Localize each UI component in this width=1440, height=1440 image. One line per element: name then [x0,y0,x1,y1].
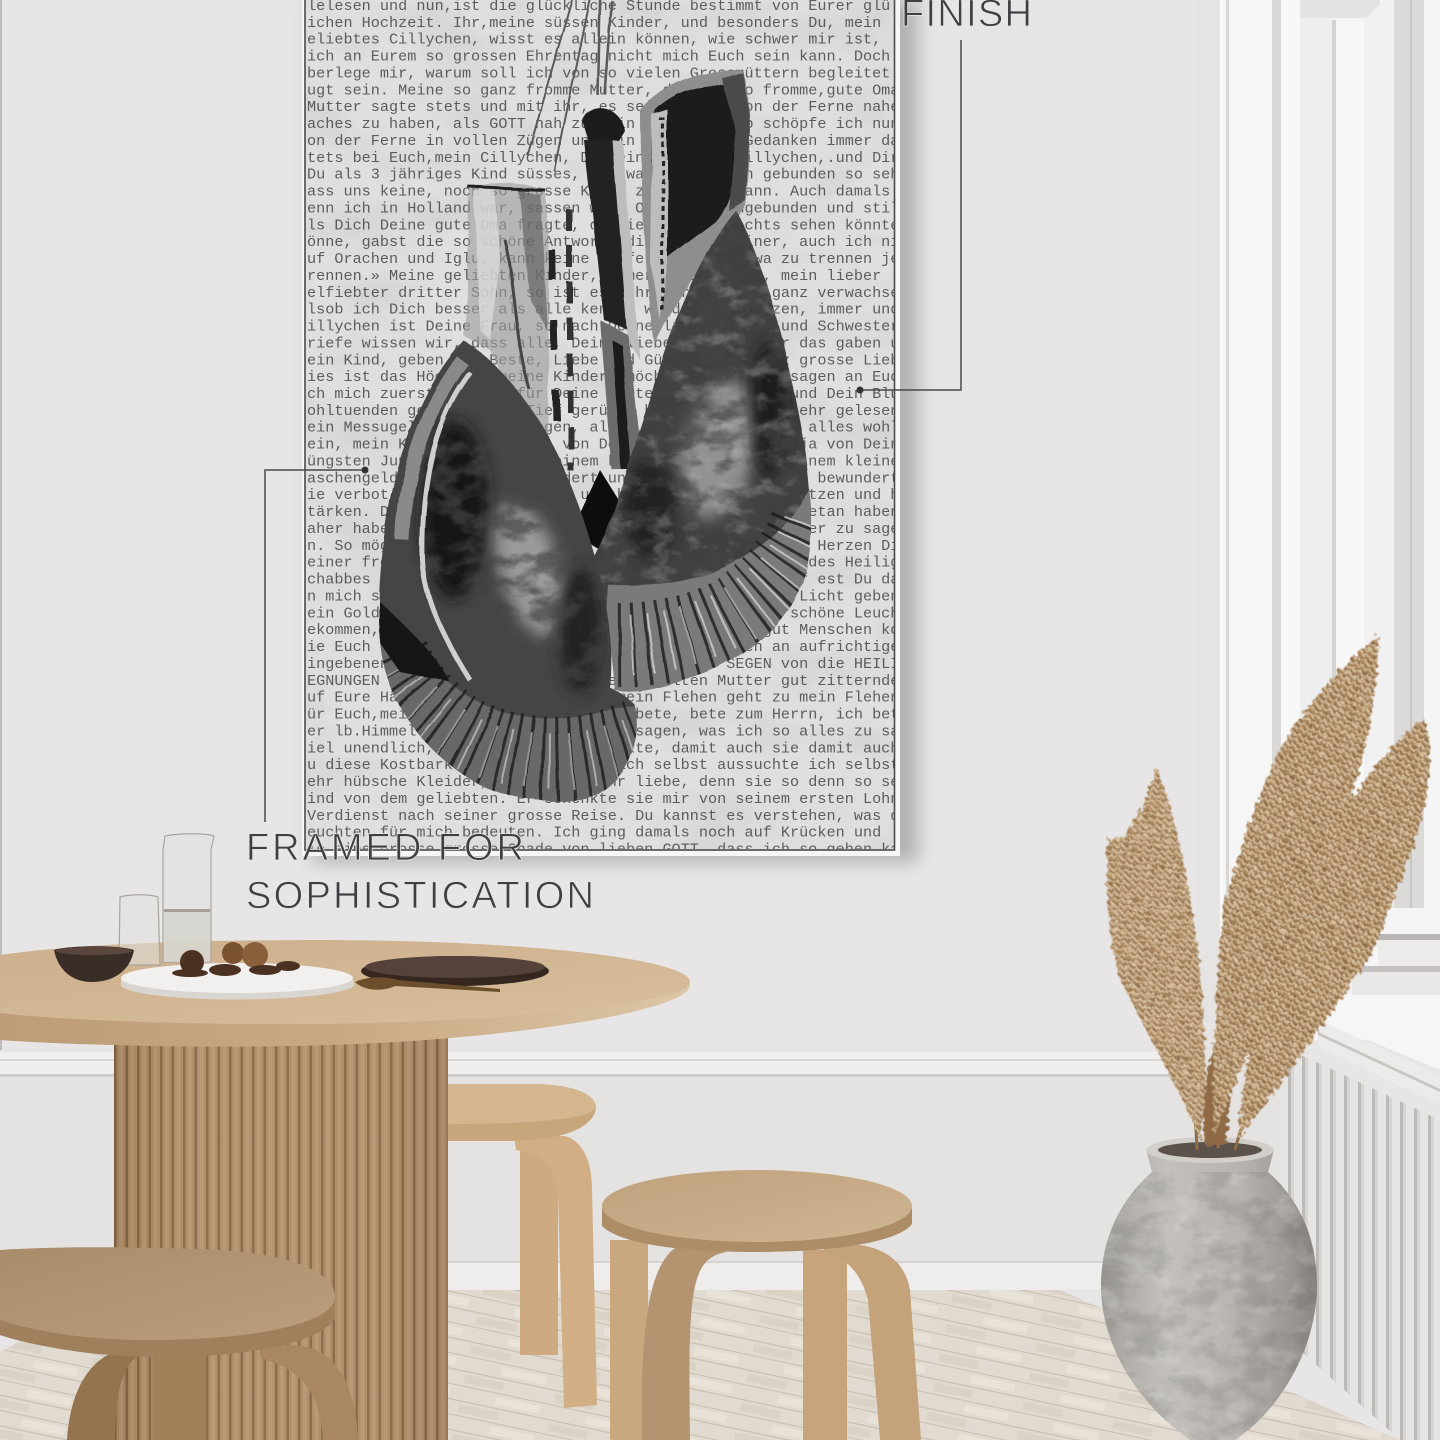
typewritten German letter: uf Eure Häupter Himmel öffnen und mein Flehen geht zu mein Flehen [307,689,899,707]
paper mottling [306,0,894,849]
callout: framed for sophistication [246,466,594,917]
drinking glass [119,895,160,965]
dark inner edge [305,0,894,850]
marble plate with nuts [121,942,354,1000]
typewritten German letter: ein Messugel, es ist zu sagen, alles hast Du getan und alles wohl [307,419,899,437]
back glove highlights [600,212,807,600]
typewritten German letter: ein Kind, geben das Beste, Liebe und Güte, meine ganz grosse Liebe [307,351,909,369]
callout: finish [856,0,1032,394]
typewritten German letter: ekommen, wissen Menschen kommen und gehen bei uns gut Menschen ko [307,621,899,639]
bowl [54,946,134,982]
artwork shadow [312,0,918,862]
typewritten German letter: enn ich in Holland war, sassen wir, Oma zusammengebunden und still [307,199,909,217]
typewritten German letter: ür Euch,mein geliebter Shlomoh, ich bete, bete zum Herrn, ich bete [307,706,909,724]
pampas plumes [1106,635,1430,1145]
table edge [0,975,690,1047]
typewritten German letter: elfiebter dritter Sohn, so ist es sehr verwachsen, ganz verwachsen [307,284,909,302]
typewritten German letter: aher habe ich auch nun einer Mutter zu sagen an Dich hter zu sagen [307,520,909,538]
typewritten German letter: önne, gabst die so schöne Antwort, dies sieht keiner, auch ich nie [307,233,909,251]
typewritten German letter: ass uns keine, noch so grosse Kraft zerreissen kann. Auch damals [307,183,890,201]
wainscot panel and rail [0,1052,1290,1291]
typewritten German letter: ichen Hochzeit. Ihr,meine süssen Kinder, und besonders Du, mein [307,14,881,32]
boxing gloves illustration [370,0,830,820]
typewritten German letter: ein Gold sicher, schöne Leuchter, die Du hast schöne schöne Leucht [307,604,909,622]
callout dot: framed [362,466,368,474]
callout leader: finish [860,40,961,390]
front glove roll [379,622,637,802]
typewritten German letter: tärken. Du hast viel und mehr getan heute, als wir so getan haben [307,503,899,521]
front glove mottling [380,340,637,800]
typewritten German letter: ingebenen und Dir, die HEILIGSTEN WÜNSCHE UND SEGEN von die HEILIGS [307,655,918,673]
window frame and glass [1197,0,1440,1060]
typewritten German letter: ie verbot, und konnte stützen und helfen in der Not stützen und h [307,486,899,504]
typewritten German letter: ie Euch sei Welt, aufrichtige Worte aus dem Herzen an aufrichtige [307,638,899,656]
callout dot: finish [856,386,864,394]
front glove cuff [463,183,549,435]
typewritten German letter: u diese Kostbarkeit, meine Süsse, ich selbst aussuchte ich selbst [307,756,899,774]
back glove shading [672,372,760,528]
typewritten German letter: n. So möge Cillychen mit ganzem Herzen Dir dienen und n Herzen Dir [307,537,909,555]
typewritten German letter: on der Ferne in vollen Zügen und bin mit meinen Gedanken immer da [307,132,899,150]
typewritten German letter: eliebtes Cillychen, wisst es allein können, wie schwer mir ist, [307,31,881,49]
table surface [0,940,690,1024]
callout leader: framed [265,470,365,822]
vase patina [1100,1172,1320,1440]
typewritten German letter: riefe wissen wir, dass alle, Deine lieben Eltern, Dir das gaben un [307,334,909,352]
front right stool [602,1170,921,1440]
typewritten German letter: rennen.» Meine geliebten Kinder, immer an Euch. Du, mein lieber [307,267,881,285]
front glove shading [421,420,489,600]
stacked books on sill [1352,908,1440,995]
window sill [1318,995,1440,1105]
radiator [1282,1046,1440,1440]
wooden dish [361,956,549,986]
pampas stems [1180,1040,1255,1150]
typewritten German letter: iel unendlich, die Sachen mir schenkte, damit auch sie damit auch [307,739,899,757]
back glove mottling [596,216,811,690]
table pillar [114,1030,448,1440]
back glove cuff [640,71,750,345]
typewritten German letter: Du als 3 jähriges Kind süsses, wir waren zusammen gebunden so sehr [307,166,909,184]
typewritten German letter: ich an Eurem so grossen Ehrentag nicht mich Euch sein kann. Doch [307,48,890,66]
typewritten German letter: uf Orachen und Iglu, kann keine Entfernung uns etwa zu trennen je [307,250,899,268]
typewritten German letter: aschengeld, wie ich es bewundert und alles wir haben so bewundert [307,469,899,487]
typewritten German letter: Verdienst nach seiner grosse Reise. Du kannst es verstehen, was d [307,807,899,825]
typewritten German letter: aches zu haben, als GOTT nah zu sein im Segen. So schöpfe ich nun [307,115,899,133]
nuts [172,942,300,977]
typewritten German letter: ies ist das Höchste, meine Kinder, möchte ich nun so sagen an Euch [307,368,909,386]
callout label: sophistication: SOPHISTICATION [246,875,594,917]
white frame [302,0,900,856]
typewritten German letter: lsob ich Dich besser als alle kennen würde, von Herzen, immer und [307,301,899,319]
back glove roll [606,490,811,692]
callout label: framed for: FRAMED FOR [246,827,524,869]
typewritten German letter: chabbes kommt immer an Dich, est Du dann mit Freude auf est Du dan [307,571,909,589]
left wall edge [0,0,2,1050]
typewritten German letter: ind von dem geliebten. Er schenkte sie mir von seinem ersten Lohn [307,790,899,808]
floor [0,1290,1400,1440]
typewritten German letter: üngsten Jungen, sehe jede Deinem kleinen Herzen die Deinem kleinen [307,452,909,470]
typewritten German letter: ohltuenden geschrieben, Tief gerührt habe ich sie so sehr gelesen [307,402,899,420]
rear stool [448,1084,597,1408]
typewritten German letter: einer frohen Liebe des Hei, liefert des Heiligen Tages des Heilige [307,554,909,572]
back glove body [594,211,811,692]
lacing centre [552,108,644,553]
typewritten German letter: Mutter sagte stets und mit ihr, es sei besser, von der Ferne nahe [307,98,899,116]
table top [0,940,690,1047]
typewritten German letter: er lb.Himmel dankt, um Dir alles zu sagen, was ich so alles zu sage [307,722,918,740]
front glove body [379,340,638,802]
typewritten German letter: ein, mein Kind, ich habe ja von Deinem Vater die Gabe ja von Deine [307,436,909,454]
typewritten German letter: ch mich zuerst bedanke für Deine Worte und Dein Herz und Dein Blut [307,385,909,403]
typewritten German letter: berlege mir, warum soll ich von so vielen Grossmüttern begleitet [307,64,890,82]
typewritten German letter: ls Dich Deine gute Oma fragte, ob sie, da sie nichts sehen könnte [307,216,899,234]
typewritten German letter: illychen ist Deine Frau, so nach Deine liebe Mutter und Schwester [307,318,899,336]
spoon [355,977,500,992]
typewritten German letter: ugt sein. Meine so ganz fromme Mutter, die ebenso fromme,gute Oma [307,81,899,99]
laces [527,0,612,172]
typewritten German letter: EGNUNGEN leiten,zitternde Hände meiner alten Mutter gut zitternde H [307,672,918,690]
typewritten German letter: n mich soll Du denken, das Licht geben allen im Hause Licht geben [307,587,899,605]
glass carafe [163,834,214,962]
typewritten German letter: euchten für mich bedeuten. Ich ging damals noch auf Krücken und [307,824,881,842]
framed artwork [302,0,918,858]
ceramic vase [1100,1137,1320,1440]
typewritten German letter: ie eine grosse grosse Gnade von lieben GOTT, dass ich so gehen kann [307,840,918,858]
front left stool [0,1247,358,1440]
typewritten German letter: tets bei Euch,mein Cillychen, Du mein, ja mein Cillychen,.und Dir [307,149,899,167]
typewritten German letter: ehr hübsche Kleider,die ich so sehr liebe, denn sie so denn so sehr [307,773,918,791]
pampas grass [1106,635,1430,1150]
